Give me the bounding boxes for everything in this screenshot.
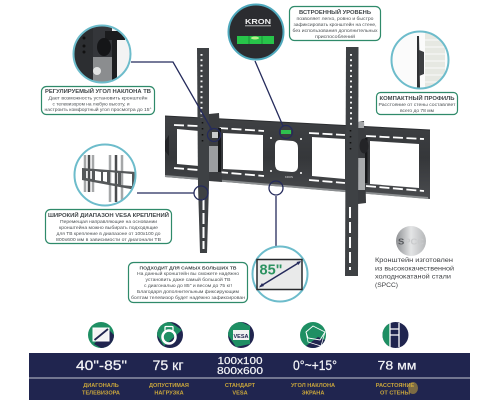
KRON logo: KRON <box>245 17 271 26</box>
SPCC description: Кронштейн изготовлен <box>375 256 453 264</box>
SPCC steel note: из высококачественной <box>375 264 454 272</box>
spec: VESA <box>217 355 263 396</box>
leader: vesa <box>137 186 208 200</box>
callout: VESA range: ШИРОКИЙ ДИАПАЗОН VESA КРЕПЛЕНИЙ <box>48 211 169 219</box>
spec: wall distance: 78 мм <box>378 358 416 372</box>
callout: built-in level: без использования дополнительных <box>292 28 378 33</box>
spec: diagonal: ТЕЛЕВИЗОРА <box>82 390 120 396</box>
spec: VESA: VESA <box>232 390 248 396</box>
SPCC steel note: (SPCC) <box>375 282 398 289</box>
callout: VESA range: Перемещая направляющие на основании <box>60 219 157 224</box>
circle: VESA range <box>74 144 136 206</box>
spec: load <box>149 358 189 396</box>
leader: 85 inch <box>269 181 283 246</box>
SPCC steel note <box>375 226 454 289</box>
left rail lower slots <box>202 199 204 249</box>
spec: VESA: 100x100 <box>218 355 263 367</box>
callout: largest TVs: Благодаря дополнительным фиксирующим <box>137 289 239 294</box>
callout: adjustable tilt <box>42 86 154 114</box>
SPCC steel note: холоднокатаной стали <box>375 272 451 280</box>
callout: VESA range: кронштейна можно выбирать подходящие <box>59 224 158 230</box>
right tilt knob <box>360 138 368 154</box>
frame top edge <box>165 116 430 130</box>
icon: VESA: VESA <box>234 334 249 340</box>
callout: largest TVs: болтам телевизор будет надёжно зафиксирован <box>131 295 246 300</box>
tilt lock detail <box>212 132 218 138</box>
KRON frame mark: KRON <box>285 175 293 179</box>
spec: load: 75 кг <box>152 358 184 373</box>
screen icon <box>257 260 302 290</box>
horizontal TV frame <box>165 116 430 199</box>
spec: load: ДОПУСТИМАЯ <box>149 383 189 389</box>
green level vial <box>237 36 274 44</box>
spec: load: НАГРУЗКА <box>154 390 184 396</box>
icon: screen diagonal <box>88 322 114 348</box>
callout: compact profile: всего до 78 мм <box>400 108 434 113</box>
spec: VESA: 800x600 <box>217 365 263 377</box>
icon: wall distance <box>382 322 408 348</box>
callout: built-in level: ВСТРОЕННЫЙ УРОВЕНЬ <box>299 8 371 16</box>
spec: wall distance: ОТ СТЕНЫ <box>380 390 410 396</box>
callout: built-in level: приспособлений <box>315 33 355 39</box>
callout: adjustable tilt: Дает возможность установить кронштейн <box>48 94 148 100</box>
callout: compact profile <box>376 92 458 114</box>
leader: level <box>255 61 292 138</box>
spec: VESA: СТАНДАРТ <box>225 383 256 389</box>
icon: VESA <box>228 322 254 348</box>
right rail <box>345 47 358 276</box>
callout: largest TVs: На данный кронштейн вы сможете надёжно <box>137 270 239 276</box>
right rail lower slots <box>349 207 351 270</box>
spec: tilt <box>291 358 337 396</box>
callout: largest TVs <box>128 262 248 302</box>
right rail holes <box>350 54 352 125</box>
callout: VESA range: 800х600 мм в зависимости от диагонали ТВ <box>56 237 161 242</box>
spec: diagonal: 40"-85" <box>76 358 127 373</box>
callout: adjustable tilt: настроить комфортный угол просмотра до 15° <box>44 106 152 112</box>
spec: tilt: ЭКРАНА <box>302 390 324 396</box>
callout: VESA range <box>46 210 172 244</box>
SPCC steel note: SPCC <box>398 236 424 246</box>
callout: largest TVs: установить даже самый большой ТВ <box>146 276 230 282</box>
icon: weight <box>157 322 183 348</box>
left tilt knob <box>165 135 169 156</box>
circle: 85 inch screen <box>252 246 308 303</box>
callout: VESA range: для ТВ крепление в диапазоне от 100х100 до <box>56 231 161 236</box>
spec: diagonal: ДИАГОНАЛЬ <box>83 383 119 389</box>
callout: compact profile: Расстояние от стены составляет <box>378 102 456 107</box>
circle: built-in level <box>228 4 284 60</box>
frame mount holes <box>270 137 302 174</box>
gold smudge <box>408 382 418 394</box>
callout: adjustable tilt: с телевизором на любую высоту, и <box>52 102 130 106</box>
callout: largest TVs: ПОДХОДИТ ДЛЯ САМЫХ БОЛЬШИХ ТВ <box>140 266 237 272</box>
circle: tilt angle detail <box>72 24 132 84</box>
right tilt plate <box>358 121 366 204</box>
bracket level <box>281 130 291 134</box>
size label: 85" <box>260 262 283 278</box>
diagonal arrow <box>260 262 300 286</box>
left rail <box>197 48 209 253</box>
leader: tilt angle <box>131 62 220 142</box>
spec: wall distance: РАССТОЯНИЕ <box>376 383 414 389</box>
callout: compact profile: КОМПАКТНЫЙ ПРОФИЛЬ <box>380 94 455 102</box>
circle: compact profile <box>391 31 449 89</box>
SPCC badge <box>396 226 426 256</box>
upper frame slots <box>174 125 424 139</box>
frame bottom lip <box>165 176 428 198</box>
icon: tilt angle <box>300 322 326 348</box>
callout: built-in level: позволяет легко, ровно и быстро <box>296 16 374 21</box>
spec: tilt: УГОЛ НАКЛОНА <box>291 383 335 389</box>
spec: diagonal <box>76 358 127 396</box>
specs band <box>29 353 470 400</box>
callout: largest TVs: с диагональю до 85" и весом до 75 кг! <box>144 283 232 288</box>
callout: built-in level: зафиксировать кронштейн на стене, <box>294 21 376 27</box>
left tilt plate <box>209 113 222 182</box>
lower frame slots <box>174 168 424 191</box>
spec: wall distance <box>376 358 418 396</box>
callout: built-in level <box>290 6 380 40</box>
left rail holes <box>200 54 202 118</box>
callout: adjustable tilt: РЕГУЛИРУЕМЫЙ УГОЛ НАКЛОНА ТВ <box>45 87 151 95</box>
spec: tilt: 0°~+15° <box>293 358 337 373</box>
wall bracket <box>165 47 430 276</box>
